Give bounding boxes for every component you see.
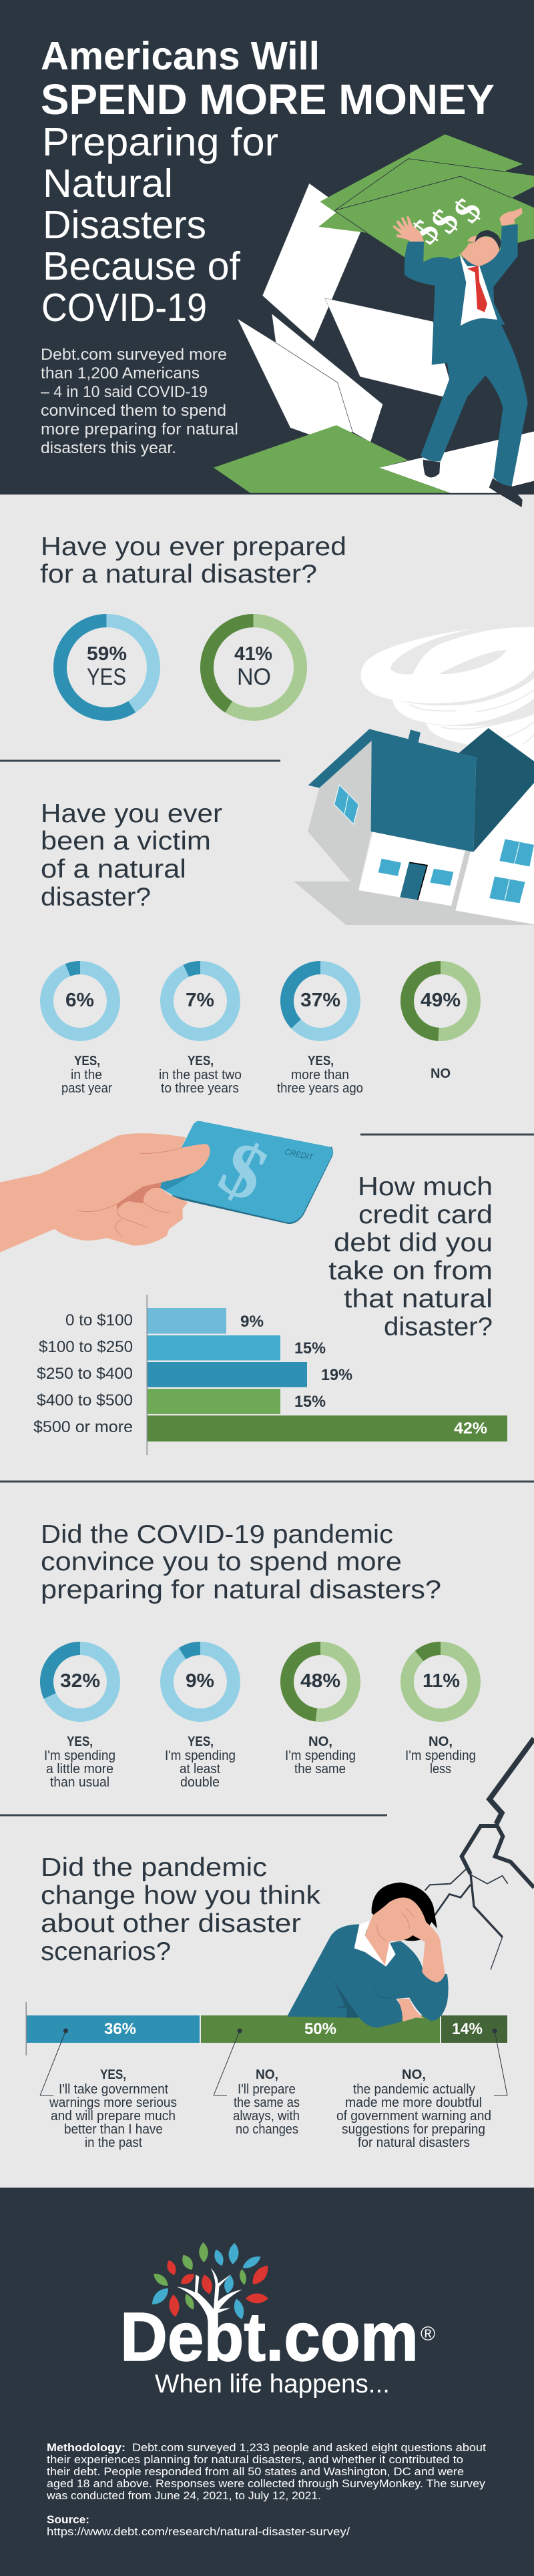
donut: 37%: 37% (300, 990, 340, 1011)
label: yes, spending a little more (44, 1734, 115, 1790)
bar chart: credit card debt: 0 to $100 (65, 1311, 133, 1329)
illustration: worried woman (287, 1883, 449, 2027)
source (47, 2513, 350, 2538)
label: yes, in the past two to three years: in the past two (159, 1068, 242, 1082)
callout: yes, take warnings more seriously: better than I have (64, 2122, 163, 2137)
label: yes, spending at least double: double (180, 1775, 220, 1790)
label: no, spending the same: NO, (308, 1734, 332, 1749)
heading: did the pandemic change: change how you think (41, 1881, 321, 1910)
title: COVID-19 (41, 286, 207, 330)
donut: 9% (167, 1648, 234, 1715)
source: https://www.debt.com/research/natural-disaster-survey/ (47, 2525, 350, 2538)
heading: have you ever been a victim: disaster? (41, 883, 151, 912)
donut: 32%: 32% (60, 1670, 100, 1692)
donut: 11%: 11% (423, 1670, 460, 1692)
callout: yes, take warnings more seriously (40, 2029, 177, 2150)
heading: did the pandemic change: Did the pandemic (41, 1853, 267, 1882)
callout: no, prepare the same: the same as (234, 2096, 300, 2110)
illustration: hand holding credit card (0, 1121, 333, 1253)
icon: dollar signs on money: $ (423, 202, 467, 241)
heading: how much credit card debt: that natural (344, 1285, 493, 1313)
donut: 6% (47, 968, 113, 1034)
callout: yes, take warnings more seriously: warnings more serious (49, 2096, 177, 2110)
donut: 59% yes: YES (87, 664, 126, 690)
donut: 7% (167, 968, 234, 1034)
callout: no, more doubtful: suggestions for preparing (342, 2122, 485, 2137)
footer panel background (0, 2188, 534, 2576)
callout: no, more doubtful: the pandemic actually (353, 2082, 475, 2097)
title: SPEND MORE MONEY (41, 75, 495, 123)
heading: have you ever been a victim: been a victim (41, 827, 211, 856)
donut: 6%: 6% (65, 990, 94, 1011)
label: yes, more than three years ago: more than (291, 1068, 349, 1082)
title: Americans Will (41, 34, 320, 78)
illustration: lightning bolt (425, 1738, 534, 1970)
source: Source: (47, 2513, 89, 2526)
methodology: their debt. People responded from all 50 states and Washington, DC and were (47, 2465, 464, 2478)
donut: 49% (407, 968, 474, 1034)
bar chart: credit card debt: 9% (240, 1313, 264, 1331)
callout: yes, take warnings more seriously: and will prepare much (51, 2109, 176, 2124)
heading: have you ever been a victim: of a natural (41, 855, 186, 884)
callout: no, more doubtful: for natural disasters (358, 2136, 470, 2150)
heading: have you ever prepared: Have you ever prepared (41, 533, 346, 561)
label: yes, more than three years ago (277, 1054, 363, 1096)
heading: how much credit card debt: How much (358, 1173, 493, 1201)
illustration: tornado and house (294, 627, 534, 925)
title: Preparing for (42, 120, 278, 164)
intro text (41, 346, 238, 457)
label: yes, more than three years ago: three years ago (277, 1081, 363, 1096)
heading: how much credit card debt: disaster? (384, 1313, 493, 1341)
label: yes, in the past year (61, 1054, 112, 1096)
donut: 48% (287, 1648, 354, 1715)
title (41, 34, 495, 330)
callout: no, prepare the same (214, 2029, 300, 2137)
title: Natural (43, 162, 173, 206)
intro text: – 4 in 10 said COVID-19 (41, 383, 208, 401)
label: yes, in the past two to three years: YES, (188, 1054, 214, 1068)
stacked bar: pandemic change: 14% (452, 2020, 483, 2038)
stacked bar: pandemic change: 36% (104, 2020, 136, 2038)
bar chart: credit card debt: $250 to $400 (37, 1365, 133, 1383)
bar chart: credit card debt: $400 to $500 (37, 1391, 133, 1409)
illustration: hand holding credit card: CREDIT (284, 1147, 315, 1163)
bar chart: credit card debt: 15% (294, 1339, 326, 1357)
title: Disasters (43, 203, 206, 247)
label: yes, spending a little more: than usual (50, 1775, 109, 1790)
methodology: aged 18 and above. Responses were collected through SurveyMonkey. The survey (47, 2477, 486, 2490)
label: yes, spending at least double: YES, (188, 1734, 214, 1749)
label: no, spending less: NO, (429, 1734, 453, 1749)
label: yes, in the past year: past year (61, 1081, 112, 1096)
logo: debt.com tree: ® (421, 2323, 435, 2345)
heading: how much credit card debt: credit card (358, 1201, 493, 1229)
methodology: their experiences planning for natural disasters, and whether it contributed to (47, 2453, 463, 2466)
label: no, spending the same (285, 1734, 356, 1777)
heading: how much credit card debt: debt did you (334, 1229, 493, 1257)
stacked bar: pandemic change: 50% (304, 2020, 336, 2038)
donut: 32% (47, 1648, 113, 1715)
label: yes, spending a little more: YES, (67, 1734, 93, 1749)
label: yes, spending a little more: a little more (46, 1762, 113, 1777)
heading: have you ever prepared (40, 533, 346, 589)
callout: no, prepare the same: I'll prepare (238, 2082, 296, 2097)
label: no, spending less: less (430, 1762, 451, 1777)
donut: 41% no: NO (237, 664, 271, 690)
stacked bar: pandemic change (25, 2002, 507, 2055)
illustration: flying papers and money (214, 134, 534, 493)
bar chart: credit card debt: 42% (454, 1419, 487, 1437)
methodology: Debt.com surveyed 1,233 people and asked eight questions about (132, 2441, 486, 2454)
label: no, spending the same: I'm spending (285, 1748, 356, 1763)
divider (0, 1480, 534, 1483)
methodology (46, 2441, 486, 2502)
intro text: convinced them to spend (41, 402, 226, 420)
label: yes, spending at least double: at least (180, 1762, 220, 1777)
intro text: Debt.com surveyed more (41, 346, 227, 364)
callout: yes, take warnings more seriously: YES, (100, 2067, 126, 2082)
donut: 11% (407, 1648, 474, 1715)
heading: how much credit card debt (328, 1173, 493, 1341)
donut: 41% no (207, 621, 300, 714)
illustration: hand holding credit card: $ (207, 1123, 281, 1219)
donut: 59% yes: 59% (87, 643, 127, 665)
donut: 7%: 7% (186, 990, 214, 1011)
donut: 37% (287, 968, 354, 1034)
illustration: businessman (392, 208, 528, 507)
label: yes, in the past two to three years (159, 1054, 242, 1096)
divider (0, 1814, 387, 1817)
heading: how much credit card debt: take on from (328, 1257, 493, 1285)
intro text: than 1,200 Americans (41, 364, 200, 382)
callout: no, prepare the same: always, with (233, 2109, 300, 2124)
heading: did the covid-19 pandemic convince you: convince you to spend more (41, 1548, 402, 1576)
icon: dollar signs on money: $ (404, 212, 448, 252)
heading: did the covid-19 pandemic convince you (41, 1520, 441, 1604)
heading: did the covid-19 pandemic convince you: Did the COVID-19 pandemic (41, 1520, 393, 1549)
intro text: more preparing for natural (41, 420, 238, 438)
hero panel background (0, 0, 534, 495)
callout: no, more doubtful: made me more doubtful (345, 2096, 482, 2110)
label: no, spending less: I'm spending (405, 1748, 476, 1763)
logo: debt.com tree (120, 2242, 435, 2375)
bar chart: credit card debt (33, 1295, 507, 1455)
label: yes, in the past two to three years: to three years (161, 1081, 239, 1096)
methodology: was conducted from June 24, 2021, to July 12, 2021. (46, 2489, 321, 2502)
bar chart: credit card debt: 15% (294, 1393, 326, 1411)
bar chart: credit card debt: $100 to $250 (39, 1338, 133, 1356)
label: yes, more than three years ago: YES, (308, 1054, 334, 1068)
heading: did the pandemic change: about other disaster (41, 1909, 301, 1938)
callout: yes, take warnings more seriously: in the past (85, 2136, 142, 2150)
methodology: Methodology: (47, 2441, 125, 2454)
heading: did the pandemic change: scenarios? (41, 1937, 171, 1966)
callout: no, more doubtful: NO, (402, 2067, 426, 2082)
label: no, spending less (405, 1734, 476, 1777)
heading: have you ever been a victim: Have you ever (41, 799, 222, 828)
callout: no, more doubtful (336, 2029, 507, 2150)
donut: 9%: 9% (186, 1670, 214, 1692)
callout: no, prepare the same: no changes (236, 2122, 298, 2137)
bar chart: credit card debt: $500 or more (33, 1418, 133, 1436)
label: no: NO (431, 1066, 451, 1081)
label: yes, spending at least double (165, 1734, 236, 1790)
divider (0, 759, 280, 762)
heading: did the pandemic change (41, 1853, 321, 1966)
label: no, spending the same: the same (294, 1762, 346, 1777)
heading: did the covid-19 pandemic convince you: preparing for natural disasters? (41, 1576, 441, 1604)
donut: 59% yes (60, 621, 154, 714)
callout: no, prepare the same: NO, (256, 2067, 278, 2082)
label: yes, spending at least double: I'm spending (165, 1748, 236, 1763)
donut: 49%: 49% (421, 990, 461, 1011)
callout: yes, take warnings more seriously: I'll take government (59, 2082, 168, 2097)
icon: dollar signs on money: $ (446, 191, 490, 230)
label: yes, spending a little more: I'm spending (44, 1748, 115, 1763)
donut: 41% no: 41% (234, 643, 272, 665)
intro text: disasters this year. (41, 439, 176, 457)
donut: 48%: 48% (300, 1670, 340, 1692)
bar chart: credit card debt: 19% (321, 1366, 352, 1384)
tagline: When life happens... (155, 2370, 390, 2398)
logo: debt.com tree: Debt.com (120, 2298, 419, 2375)
label: yes, in the past year: YES, (74, 1054, 100, 1068)
icon: dollar signs on money (404, 191, 490, 252)
divider (360, 1133, 534, 1136)
heading: have you ever been a victim (41, 799, 222, 912)
title: Because of (43, 244, 241, 288)
label: yes, in the past year: in the (71, 1068, 102, 1082)
callout: no, more doubtful: of government warning and (336, 2109, 491, 2124)
heading: have you ever prepared: for a natural disaster? (40, 560, 317, 589)
